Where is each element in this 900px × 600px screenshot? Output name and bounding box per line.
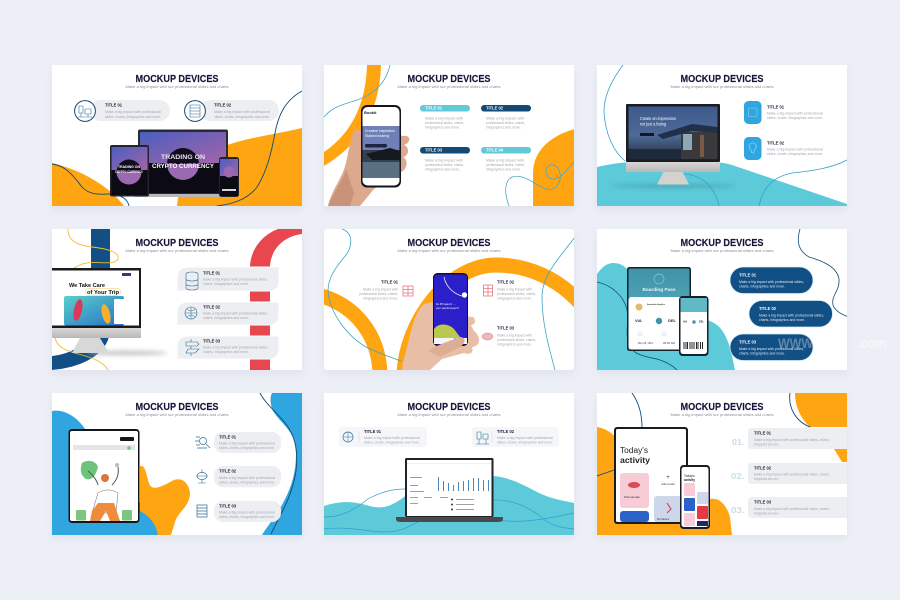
item: title 03: slides, charts, infographics and more. [219, 515, 275, 519]
item: title 01: professional slides, charts, [425, 121, 464, 125]
subtitle: Make a big impact with our professional slides and charts [398, 412, 501, 417]
laptop dashboard [396, 458, 503, 522]
item: title 01: TITLE 01 [203, 270, 221, 276]
item: title 03: 03. [731, 505, 744, 515]
item: title 02: Make a big impact with [486, 116, 524, 120]
subtitle: Make a big impact with our professional slides and charts [670, 248, 774, 253]
item: title 01: Make a big impact with professional slides, [203, 278, 268, 282]
item: title 04: professional slides, charts, [486, 163, 525, 167]
laptop mockup [134, 130, 232, 197]
item: title 01: infographics and more. [425, 126, 460, 130]
item: title 01 [420, 105, 470, 130]
tablet with character illustration [68, 429, 140, 523]
tablet boarding pass: Boarding Pass [642, 287, 676, 292]
item: title 02: infographics and more. [497, 296, 532, 300]
watermark: .com [857, 335, 887, 351]
item: title 01: slides, charts, infographics and more. [105, 115, 161, 119]
item: title 01 [75, 100, 170, 121]
item: title 02 [744, 137, 823, 160]
item: title 01: TITLE 01 [739, 272, 757, 278]
item: title 04: infographics and more. [486, 168, 521, 172]
tablet boarding pass: Samantha Hopkins [647, 303, 666, 306]
heading: MOCKUP DEVICES [680, 401, 764, 413]
panel: slide 7 tablet illustration [52, 393, 302, 535]
panel: slide 9 tablet and phone activity [597, 393, 847, 535]
phone activity app [680, 465, 710, 529]
phone activity app: Today's [684, 474, 695, 478]
item: title 03: professional slides, charts, [425, 163, 464, 167]
item: title 03: charts, infographics and more. [739, 352, 785, 356]
item: title 02: Make a big impact with professional slides, [759, 314, 824, 318]
item: title 01: TITLE 01 [219, 434, 237, 440]
item: title 01 [177, 267, 279, 291]
subtitle: Make a big impact with our professional slides and charts [126, 412, 229, 417]
item: title 01: TITLE 01 [754, 430, 772, 436]
item: title 02: Make a big impact with professional [767, 148, 823, 152]
item: title 01 [195, 432, 281, 453]
tablet boarding pass: May 08, 2021 [638, 343, 654, 345]
subtitle: Make a big impact with our professional slides and charts [670, 412, 774, 417]
tablet boarding pass: 08:00 AM [663, 342, 675, 345]
laptop mockup: TRADING ON [161, 155, 205, 161]
phone mockup: Stained sharing [365, 134, 389, 138]
panel: slide 6 tablet and phone boarding pass [597, 229, 847, 370]
item: title 02: TITLE 02 [219, 468, 237, 474]
item: title 04: Make a big impact with [486, 158, 524, 162]
item: title 03 [177, 336, 279, 359]
heading: MOCKUP DEVICES [408, 401, 490, 413]
phone boarding pass: DEL [699, 320, 704, 324]
panel: slide 3 desktop monitor [597, 65, 847, 206]
item: title 01: charts, infographics and more. [739, 284, 785, 288]
phone mockup [361, 105, 401, 188]
tablet mockup: CRYPTO CURRENCY [115, 170, 144, 174]
phone boarding pass: VIA [683, 320, 687, 324]
item: title 02: Make a big impact with professional [219, 476, 275, 480]
item: title 01: infographics and more. [363, 296, 398, 300]
item: title 01 [339, 427, 427, 447]
phone activity app: activity [684, 478, 695, 482]
item: title 01: Make a big impact with professional slides, [739, 280, 804, 284]
item: title 03: Make a big impact with professional slides, [739, 347, 804, 351]
panel: slide 4 monitor with navy and red bands [52, 229, 302, 370]
item: title 04: TITLE 04 [486, 148, 504, 153]
heading: MOCKUP DEVICES [136, 73, 218, 85]
phone boarding pass [679, 296, 708, 356]
panel: slide 5 phone with orange arcs [324, 229, 574, 370]
item: title 03: Make a big impact with professional slides, [203, 346, 268, 350]
item: title 02 [472, 427, 559, 447]
item: title 01 [359, 280, 413, 300]
item: title 02: charts, infographics and more. [203, 316, 249, 320]
item: title 02: Make a big impact with professional [497, 436, 553, 440]
item: title 02 [731, 463, 847, 484]
item: title 03: TITLE 03 [497, 326, 515, 330]
phone mockup: Is Project ... [436, 302, 456, 306]
hand holding phone [402, 301, 479, 370]
desktop monitor [611, 104, 735, 188]
item: title 02: slides, charts, infographics and more. [767, 152, 823, 156]
item: title 02: Make a big impact with professional [214, 110, 270, 114]
item: title 01: Make a big impact with professional [767, 112, 823, 116]
panel: slide 8 laptop dashboard [324, 393, 574, 535]
item: title 01 [730, 267, 813, 294]
item: title 02 [196, 466, 281, 487]
item: title 03 [730, 334, 813, 360]
desktop monitor: Create an impression [640, 116, 677, 121]
item: title 03: Make a big impact with professional slides, charts, [754, 507, 830, 511]
item: title 01: Make a big impact with professional [105, 110, 161, 114]
heading: MOCKUP DEVICES [408, 73, 490, 85]
tablet activity app: Today's [620, 446, 648, 455]
item: title 03 [482, 326, 536, 346]
item: title 02: Make a big impact with professional slides, [203, 312, 268, 316]
item: title 01: Make a big impact with professional [219, 442, 275, 446]
item: title 01: Make a big impact with [425, 116, 463, 120]
item: title 01: 01. [732, 437, 744, 447]
item: title 01: TITLE 01 [425, 106, 443, 111]
tablet activity app: activity [620, 456, 651, 465]
thumb [428, 337, 464, 357]
item: title 03 [731, 497, 847, 518]
item: title 02 [484, 280, 536, 300]
item: title 03: TITLE 03 [754, 500, 772, 504]
item: title 01: Make a big impact with professional slides, charts, [754, 438, 830, 442]
subtitle: Make a big impact with our professional slides and charts [670, 84, 774, 89]
item: title 02: TITLE 02 [497, 429, 515, 434]
phone mockup [433, 273, 468, 346]
item: title 02: infographics and more. [486, 126, 521, 130]
subtitle: Make a big impact with our professional slides and charts [398, 248, 501, 253]
item: title 01: infographics and more. [754, 442, 779, 446]
item: title 03: infographics and more. [425, 168, 460, 172]
item: title 03 [420, 147, 470, 172]
item: title 01: TITLE 01 [105, 102, 123, 108]
item: title 03 [197, 501, 281, 522]
panel: slide 1 three devices [52, 65, 302, 206]
item: title 02: TITLE 02 [214, 102, 232, 108]
item: title 04 [481, 147, 531, 172]
subtitle: Make a big impact with our professional slides and charts [126, 84, 229, 89]
hand holding phone [328, 129, 409, 206]
item: title 01: Make a big impact with professional [364, 436, 420, 440]
tablet mockup: TRADING ON [118, 165, 141, 169]
item: title 02: Make a big impact with [497, 288, 532, 292]
item: title 02: slides, charts, infographics and more. [497, 440, 553, 444]
item: title 02: TITLE 02 [754, 466, 772, 470]
item: title 03: infographics and more. [754, 512, 779, 516]
watermark [778, 335, 887, 351]
heading: MOCKUP DEVICES [680, 73, 764, 85]
item: title 02 [749, 300, 832, 327]
item: title 02: infographics and more. [754, 477, 779, 481]
desktop monitor [52, 268, 167, 356]
item: title 02: professional slides, charts, [497, 292, 536, 296]
tablet activity app: + [666, 475, 670, 481]
item: title 03: Make a big impact with [425, 158, 463, 162]
tablet activity app [614, 427, 688, 524]
item: title 02: Make a big impact with professional slides, charts, [754, 472, 830, 476]
item: title 01: slides, charts, infographics and more. [364, 440, 420, 444]
item: title 02: TITLE 02 [759, 306, 777, 311]
heading: MOCKUP DEVICES [136, 237, 218, 249]
panel: slide 2 phone in hand [324, 65, 574, 206]
desktop monitor: not just a listing [640, 122, 667, 126]
laptop mockup: CRYPTO CURRENCY [152, 164, 214, 170]
tablet boarding pass: VIA [635, 318, 642, 323]
item: title 01 [744, 101, 823, 124]
item: title 02: slides, charts, infographics and more. [219, 480, 275, 484]
item: title 02 [481, 105, 531, 130]
item: title 01: slides, charts, infographics and more. [767, 116, 823, 120]
phone mockup [219, 157, 239, 197]
item: title 01 [732, 428, 847, 449]
tablet boarding pass: DEL [668, 318, 677, 323]
desktop monitor: We Take Care [69, 283, 105, 289]
item: title 01: TITLE 01 [364, 429, 382, 434]
desktop monitor: of Your Trip [87, 290, 119, 296]
item: title 02 [185, 100, 279, 121]
phone mockup: Bookit [364, 110, 377, 115]
item: title 02: TITLE 02 [767, 140, 785, 146]
phone mockup: Creative inspiration [365, 129, 395, 133]
tablet activity app: Pad sample [624, 495, 640, 499]
item: title 02: slides, charts, infographics and more. [214, 115, 270, 119]
tablet activity app: Numbers [657, 517, 670, 521]
subtitle: Make a big impact with our professional slides and charts [398, 84, 501, 89]
item: title 02 [177, 302, 279, 325]
tablet activity app: Add a task [661, 482, 675, 486]
watermark: WWW [778, 335, 814, 351]
phone mockup: your special project? [436, 306, 459, 310]
tablet mockup [110, 145, 149, 196]
item: title 03: TITLE 03 [739, 340, 757, 344]
item: title 03: TITLE 03 [203, 338, 221, 344]
item: title 03: TITLE 03 [425, 148, 443, 153]
item: title 02: 02. [731, 471, 744, 481]
item: title 01: TITLE 01 [767, 104, 785, 110]
item: title 03: professional slides, charts, [497, 338, 536, 342]
item: title 01: TITLE 01 [381, 280, 399, 284]
item: title 02: charts, infographics and more. [759, 318, 805, 322]
item: title 03: TITLE 03 [219, 504, 237, 508]
item: title 02: TITLE 02 [486, 106, 504, 111]
item: title 01: Make a big impact with [363, 288, 398, 292]
item: title 01: charts, infographics and more. [203, 282, 249, 286]
heading: MOCKUP DEVICES [136, 401, 218, 413]
item: title 01: professional slides, charts, [359, 292, 398, 296]
heading: MOCKUP DEVICES [408, 237, 490, 249]
heading: MOCKUP DEVICES [680, 237, 764, 249]
subtitle: Make a big impact with our professional slides and charts [126, 248, 229, 253]
item: title 02: TITLE 02 [497, 280, 515, 284]
item: title 02: professional slides, charts, [486, 121, 525, 125]
item: title 03: Make a big impact with [497, 334, 532, 338]
tablet boarding pass [627, 267, 691, 351]
item: title 02: TITLE 02 [203, 304, 221, 310]
item: title 03: charts, infographics and more. [203, 350, 249, 354]
item: title 03: infographics and more. [497, 342, 532, 346]
item: title 03: Make a big impact with professional [219, 511, 275, 515]
item: title 01: slides, charts, infographics and more. [219, 446, 275, 450]
